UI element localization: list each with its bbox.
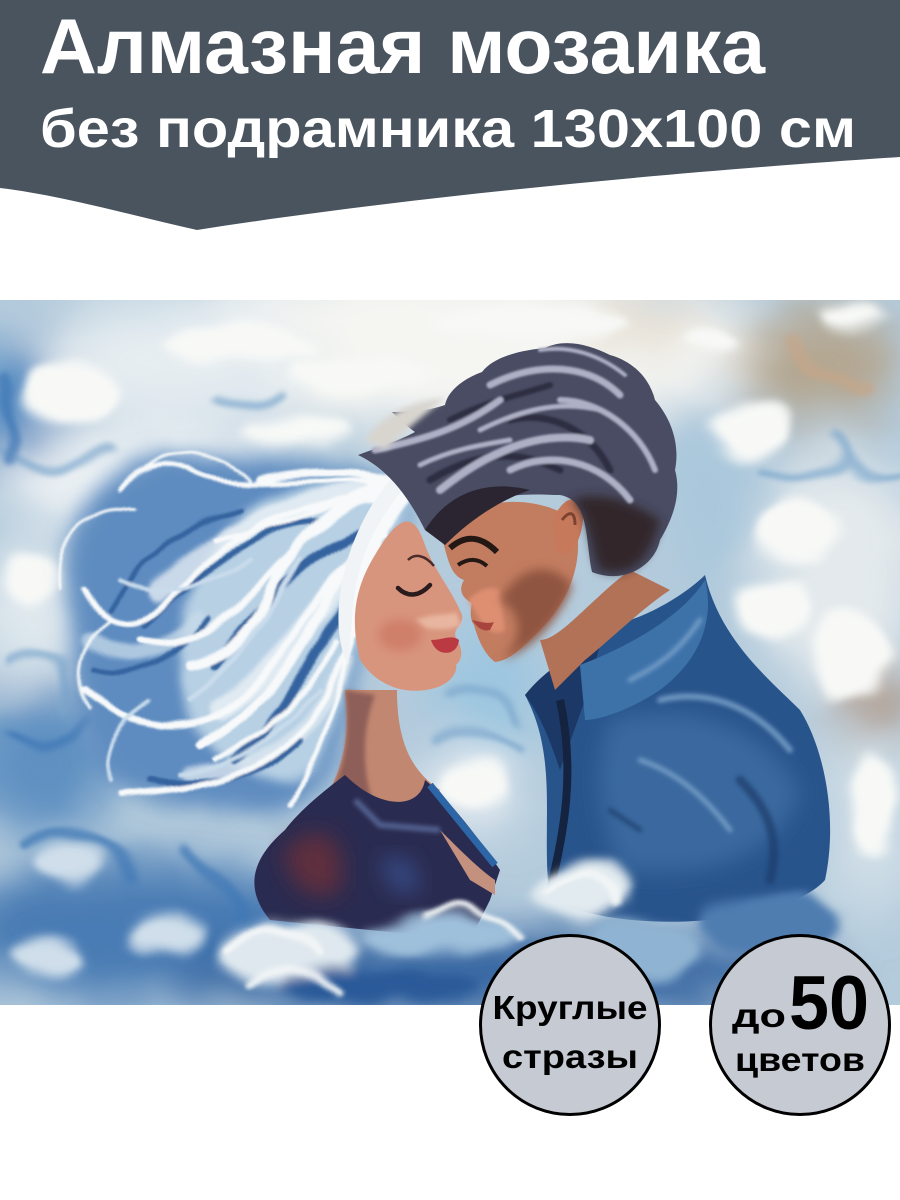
soft cloud puffs: [4, 306, 896, 978]
painting: couple among clouds: [0, 260, 900, 1015]
man hair: [358, 343, 677, 576]
sky and clouds: [0, 260, 900, 1015]
badge: up to 50 colours: 50: [789, 961, 869, 1046]
badge: round rhinestones: Круглые: [492, 989, 648, 1026]
woman neck and face: [330, 486, 462, 802]
man jacket: [525, 575, 830, 922]
woman hair: [58, 450, 412, 815]
badge: round rhinestones: стразы: [502, 1038, 638, 1075]
swirl shading: [0, 340, 900, 920]
header banner: [0, 0, 900, 230]
woman blouse: [254, 775, 500, 940]
badge: up to 50 colours: [710, 936, 890, 1114]
badge: round rhinestones: [480, 936, 660, 1114]
foreground waves: [220, 858, 840, 1004]
badge: up to 50 colours: до: [732, 997, 786, 1034]
title: [40, 2, 856, 159]
subtitle: без подрамника 130х100 см: [40, 99, 856, 159]
man neck and face: [440, 499, 670, 690]
title: Алмазная мозаика: [40, 2, 766, 90]
badge: up to 50 colours: цветов: [735, 1041, 865, 1078]
